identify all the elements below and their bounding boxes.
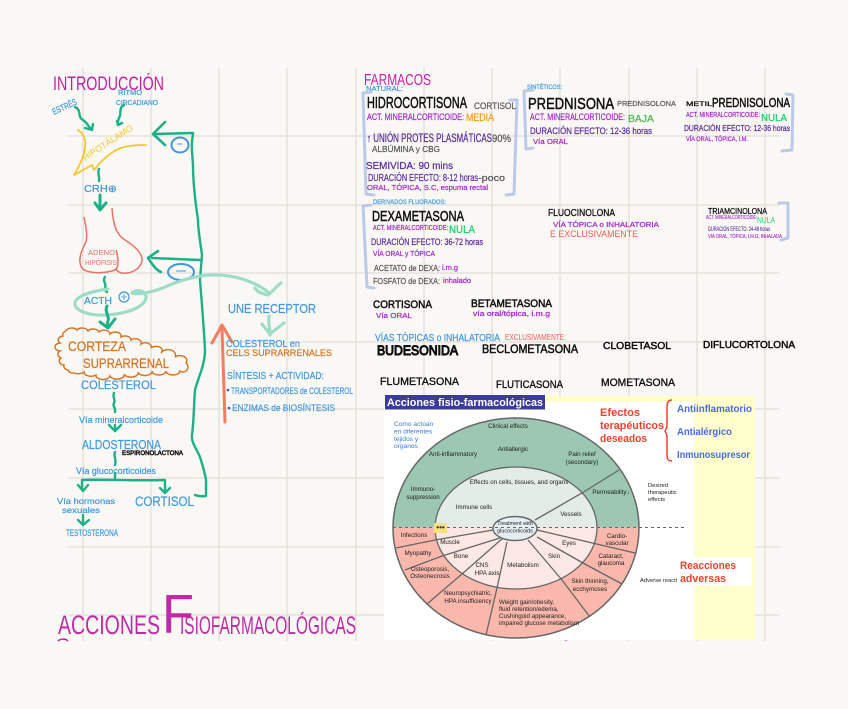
arrow: feedback to hipófisis	[148, 251, 200, 272]
icon: adenohipófisis: HIPÓFISIS	[85, 258, 117, 267]
card: prednisona: PREDNISONA	[528, 96, 614, 113]
label: vías tópicas o inhalatoria	[375, 331, 566, 344]
icon: adenohipófisis: ADENO	[88, 250, 116, 257]
card: dexametasona: inhalado	[443, 278, 471, 285]
arrow: feedback line cortisol	[192, 134, 206, 496]
card: fluocinolona	[548, 208, 659, 240]
title bar: Acciones fisio-farmacológicas	[387, 397, 543, 409]
chart labels: therapeutic	[648, 490, 677, 496]
arrow: ritmo to hipotálamo	[117, 105, 124, 125]
icon: negative sign 2	[168, 264, 194, 280]
card: dexametasona: ACETATO de DEXA:	[374, 263, 440, 273]
icon: note marker	[434, 523, 447, 533]
chart labels: Cardio-	[607, 533, 627, 540]
card: triamcinolona: TRIAMCINOLONA	[708, 206, 767, 216]
note: como actúan: Como actúan	[394, 421, 434, 428]
drug: budesonida: BUDESONIDA	[377, 342, 459, 358]
chart labels: Myopathy	[405, 550, 432, 557]
card: prednisona	[524, 90, 676, 149]
drug: clobetasol: CLOBETASOL	[603, 340, 671, 352]
card: hidrocortisona: SEMIVIDA: 90 mins	[366, 160, 453, 172]
chart labels: (secondary)	[566, 459, 598, 466]
label: natural: NATURAL:	[366, 84, 403, 93]
chart: concentric effects diagram	[393, 418, 639, 638]
chart labels: Osteonecrosis	[410, 573, 450, 580]
card: betametasona: vía oral/tópica, i.m.g	[473, 311, 550, 318]
label: vía hormonas sexuales	[57, 496, 115, 515]
card: fluocinolona: E EXCLUSIVAMENTE	[550, 229, 638, 240]
card: metilprednisolona: ACT. MINERALCORTICOIDE:	[686, 110, 760, 119]
card: hidrocortisona: ORAL, TÓPICA, S.C, espuma rectal	[367, 183, 488, 192]
chart labels: HPA insufficiency	[444, 598, 493, 605]
arrow: ACTH to receptor curve	[160, 275, 281, 295]
card: triamcinolona: DURACIÓN EFECTO: 24-48 horas	[708, 226, 770, 233]
card: triamcinolona: NULA	[757, 215, 775, 225]
chart labels: Pain relief	[568, 451, 596, 458]
card: hidrocortisona: MEDIA	[466, 112, 495, 124]
chart labels: glucocorticoids	[497, 528, 533, 534]
chart labels: Treatment with	[497, 521, 533, 527]
text: efectos terapéuticos deseados: terapéuticos	[600, 420, 664, 432]
panel: fármacos	[363, 72, 795, 391]
card: cortisona: CORTISONA	[373, 299, 433, 311]
card: metilprednisolona	[684, 94, 793, 151]
chart labels: Permeability↓	[592, 489, 630, 496]
panel: introduction flow diagram	[51, 73, 353, 539]
card: hidrocortisona: -poco	[478, 173, 505, 183]
drug: fluticasona: FLUTICASONA	[496, 379, 564, 391]
heading: acciones fisiofarmacológicas: ISIOFARMACOLÓGICAS	[180, 611, 356, 640]
label: aldosterona: ALDOSTERONA	[82, 438, 162, 452]
note: como actúan	[394, 421, 434, 450]
card: dexametasona: i.m.g	[442, 265, 458, 272]
chart labels: Skin	[548, 553, 561, 560]
card: hidrocortisona: 90%	[492, 133, 511, 145]
background: white chart area	[384, 402, 694, 640]
chart labels	[401, 423, 677, 627]
card: hidrocortisona: ALBÚMINA y CBG	[372, 144, 440, 154]
card: cortisona	[373, 299, 433, 320]
chart labels: Effects on cells, tissues, and organs	[470, 479, 568, 486]
chart labels: Cataract,	[598, 553, 624, 560]
label: colesterol: COLESTEROL	[81, 378, 156, 392]
label: derivados fluorados: DERIVADOS FLUORADOS:	[373, 199, 446, 206]
arrow: hipófisis to ACTH	[104, 277, 107, 292]
arrow: hipotálamo to CRH	[97, 169, 100, 181]
card: triamcinolona: ACT. MINERALCORTICOIDE:	[706, 215, 757, 221]
card: metilprednisolona: DURACIÓN EFECTO: 12-36 horas	[684, 123, 790, 133]
card: metilprednisolona: PREDNISOLONA	[712, 95, 790, 110]
callout: corteza suprarrenal cloud	[55, 328, 188, 380]
label: vías tópicas o inhalatoria: EXCLUSIVAMENTE:	[505, 333, 566, 342]
label: vía hormonas sexuales: Vía hormonas	[57, 496, 115, 506]
chart labels: Immune cells	[456, 504, 492, 511]
card: prednisona: ACT. MINERALCORTICOIDE:	[530, 112, 625, 123]
card: prednisona: DURACIÓN EFECTO: 12-36 horas	[530, 126, 652, 137]
label: vía glucocorticoides: Vía glucocorticoides	[76, 466, 156, 477]
label: vías tópicas o inhalatoria: VÍAS TÓPICAS o INHALATORIA	[375, 331, 500, 344]
card: dexametasona: DEXAMETASONA	[372, 208, 464, 225]
callout: reacciones adversas	[680, 557, 752, 586]
chart labels: Clinical effects	[488, 423, 528, 430]
card: hidrocortisona: DURACIÓN EFECTO: 8-12 horas	[368, 171, 478, 184]
label: sintéticos: SINTÉTICOS:	[527, 82, 562, 91]
label: vía hormonas sexuales: sexuales	[62, 505, 100, 515]
chart labels: suppression	[406, 494, 440, 501]
card: fluocinolona: FLUOCINOLONA	[548, 208, 615, 219]
text: efectos terapéuticos deseados	[600, 407, 664, 445]
arrow: estrés to hipotálamo	[75, 107, 93, 130]
text: enzimas de biosíntesis: ENZIMAS de BIOSÍNTESIS	[232, 403, 335, 414]
card: metilprednisolona: NULA	[761, 112, 787, 124]
chart labels: HPA axis	[475, 570, 499, 577]
label: ritmo circadiano	[116, 90, 158, 107]
arrow: ACTH to corteza	[100, 306, 115, 328]
chart labels: glaucoma	[598, 560, 625, 567]
text: síntesis y actividad: SÍNTESIS + ACTIVIDAD:	[227, 369, 324, 382]
chart labels: Infections	[401, 532, 427, 539]
text: colesterol en células suprarrenales	[226, 338, 332, 359]
label: ritmo circadiano: RITMO	[118, 90, 143, 97]
icon: note marker: •••	[436, 523, 445, 532]
chart labels: CNS	[475, 562, 489, 569]
arrow: feedback to hipotálamo	[153, 122, 193, 145]
card: triamcinolona	[706, 203, 788, 240]
arrow: CRH to hipófisis	[95, 195, 106, 210]
chart labels: Cushingoid appearance,	[499, 613, 566, 620]
card: dexametasona	[363, 205, 483, 288]
card: dexametasona: NULA	[449, 224, 476, 236]
chart labels: Osteoporosis,	[411, 566, 449, 573]
card: prednisona: Vía ORAL	[533, 137, 568, 146]
dot: purple mark	[564, 637, 568, 641]
drug: diflucortolona: DIFLUCORTOLONA	[703, 340, 795, 351]
label: testosterona: TESTOSTERONA	[66, 528, 118, 539]
list: desired effects: Antialérgico	[677, 427, 732, 438]
note: como actúan: organos	[394, 443, 419, 450]
label: vía mineralcorticoide: Vía mineralcorticoide	[79, 415, 163, 426]
chart labels: Muscle	[440, 539, 460, 546]
card: betametasona	[471, 298, 553, 318]
chart labels: ecchymoses	[573, 586, 607, 593]
text: transportadores de colesterol: TRANSPORTADORES de COLESTEROL	[231, 386, 353, 397]
list: desired effects	[677, 404, 752, 461]
chart labels: fluid retention/edema,	[499, 606, 559, 613]
panel: acciones fisio-farmacológicas chart	[384, 395, 755, 640]
list: desired effects: Inmunosupresor	[677, 450, 750, 461]
chart labels: effects	[648, 497, 665, 503]
card: cortisona: Vía ORAL	[376, 313, 412, 320]
label: estrés: ESTRÉS	[51, 97, 78, 117]
label: cortisol: CORTISOL	[135, 494, 194, 509]
chart labels: Skin thinning,	[571, 578, 609, 585]
card: prednisona: PREDNISOLONA	[617, 99, 676, 108]
label: une receptor: UNE RECEPTOR	[228, 302, 316, 316]
card: betametasona: BETAMETASONA	[471, 298, 553, 310]
note: como actúan: en diferentes	[394, 428, 433, 436]
arrow: colesterol to vía	[113, 393, 115, 412]
chart labels: Anti-inflammatory	[429, 451, 478, 458]
chart labels: Immuno-	[411, 486, 435, 493]
note: como actúan: tejidos y	[394, 436, 419, 443]
card: hidrocortisona: ACT. MINERALCORTICOIDE:	[367, 112, 464, 123]
card: hidrocortisona	[363, 92, 517, 195]
card: fluocinolona: VÍA TÓPICA o INHALATORIA	[553, 220, 659, 229]
arrow: receptor down	[262, 316, 284, 335]
arrow: to testosterona	[78, 515, 89, 525]
drug: beclometasona: BECLOMETASONA	[482, 342, 578, 356]
callout: corteza suprarrenal cloud: CORTEZA	[68, 339, 126, 354]
drug: flumetasona: FLUMETASONA	[380, 376, 460, 388]
icon: negative sign 1	[172, 138, 188, 152]
heading: fármacos: FARMACOS	[364, 72, 431, 89]
heading: Introducción: INTRODUCCIÓN	[53, 73, 164, 95]
heading: acciones fisiofarmacológicas	[58, 583, 356, 645]
text: efectos terapéuticos deseados: deseados	[600, 433, 647, 445]
card: dexametasona: VÍA ORAL y TÓPICA	[373, 249, 435, 258]
chart labels: Desired	[648, 483, 668, 489]
card: prednisona: BAJA	[628, 114, 654, 125]
background: yellow sheet	[545, 396, 755, 640]
card: dexametasona: DURACIÓN EFECTO: 36-72 horas	[371, 237, 483, 248]
heading: acciones fisiofarmacológicas: F	[162, 583, 194, 645]
chart labels: Vessels	[560, 511, 582, 518]
arrow: branch to hormonas and cortisol	[78, 473, 170, 493]
label: espironolactona: ESPIRONOLACTONA	[122, 451, 183, 457]
chart labels: Weight gain/obesity,	[499, 599, 554, 606]
label: CRH positive: CRH⊕	[84, 184, 117, 195]
callout: ACTH ellipse	[75, 289, 160, 315]
card: hidrocortisona: HIDROCORTISONA	[367, 95, 467, 112]
arrow: aldosterona to vía	[114, 452, 116, 465]
card: hidrocortisona: CORTISOL	[474, 101, 516, 112]
chart labels: Metabolism	[507, 562, 539, 569]
icon: adenohipófisis	[80, 208, 142, 273]
drug: mometasona: MOMETASONA	[601, 377, 676, 389]
chart labels: Neuropsychiatric,	[444, 590, 492, 597]
card: triamcinolona: VÍA ORAL, TÓPICA, I.M.G, INHALADA	[708, 233, 782, 240]
callout: ACTH ellipse: ACTH	[84, 296, 112, 307]
card: dexametasona: FOSFATO de DEXA:	[373, 276, 440, 286]
text: transportadores de colesterol	[227, 386, 353, 397]
icon: hipotálamo: HIPOTÁLAMO	[81, 123, 135, 163]
list: desired effects: Antiinflamatorio	[677, 404, 752, 415]
callout: corteza suprarrenal cloud: SUPRARRENAL	[83, 356, 169, 371]
arrow: to aldosterona	[109, 425, 121, 431]
label: ritmo circadiano: CIRCADIANO	[116, 98, 158, 107]
text: efectos terapéuticos deseados: Efectos	[600, 407, 640, 419]
chart labels: impaired glucose metabolism	[499, 620, 579, 627]
card: dexametasona: ACT. MINERALCORTICOIDE:	[373, 223, 448, 232]
chart labels: Antiallergic	[498, 446, 528, 453]
heading: acciones fisiofarmacológicas: ACCIONES	[58, 610, 160, 640]
chart labels: Eyes	[562, 540, 576, 547]
arrow: upward synthesis	[212, 325, 232, 422]
text: colesterol en células suprarrenales: COLESTEROL en	[226, 338, 300, 350]
divider: dashed therapeutic vs adverse	[393, 526, 684, 528]
text: colesterol en células suprarrenales: CELS SUPRARRENALES	[226, 348, 332, 359]
chart labels: vascular	[605, 540, 629, 547]
bracket: desired effects	[665, 400, 672, 461]
icon: hipotálamo	[74, 123, 146, 175]
card: metilprednisolona: VÍA ORAL, TÓPICA, I.M.	[686, 134, 748, 143]
callout: reacciones adversas: Reacciones	[680, 560, 736, 572]
chart labels: Adverse reacti	[640, 578, 677, 584]
card: metilprednisolona: METIL	[686, 101, 713, 108]
callout: reacciones adversas: adversas	[680, 573, 726, 585]
card: hidrocortisona: ↑ UNIÓN PROTES PLASMÁTICAS	[367, 132, 492, 145]
chart labels: Bone	[454, 553, 469, 560]
